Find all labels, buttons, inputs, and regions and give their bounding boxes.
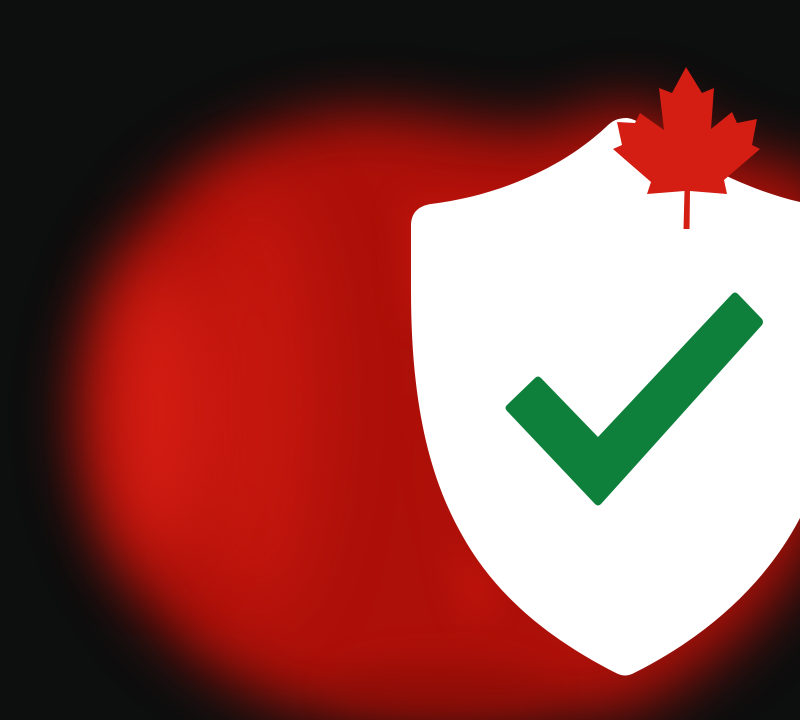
shield	[411, 118, 800, 676]
red glow	[78, 105, 800, 720]
icon: maple leaf	[613, 67, 760, 229]
icon: green check mark	[506, 292, 763, 506]
